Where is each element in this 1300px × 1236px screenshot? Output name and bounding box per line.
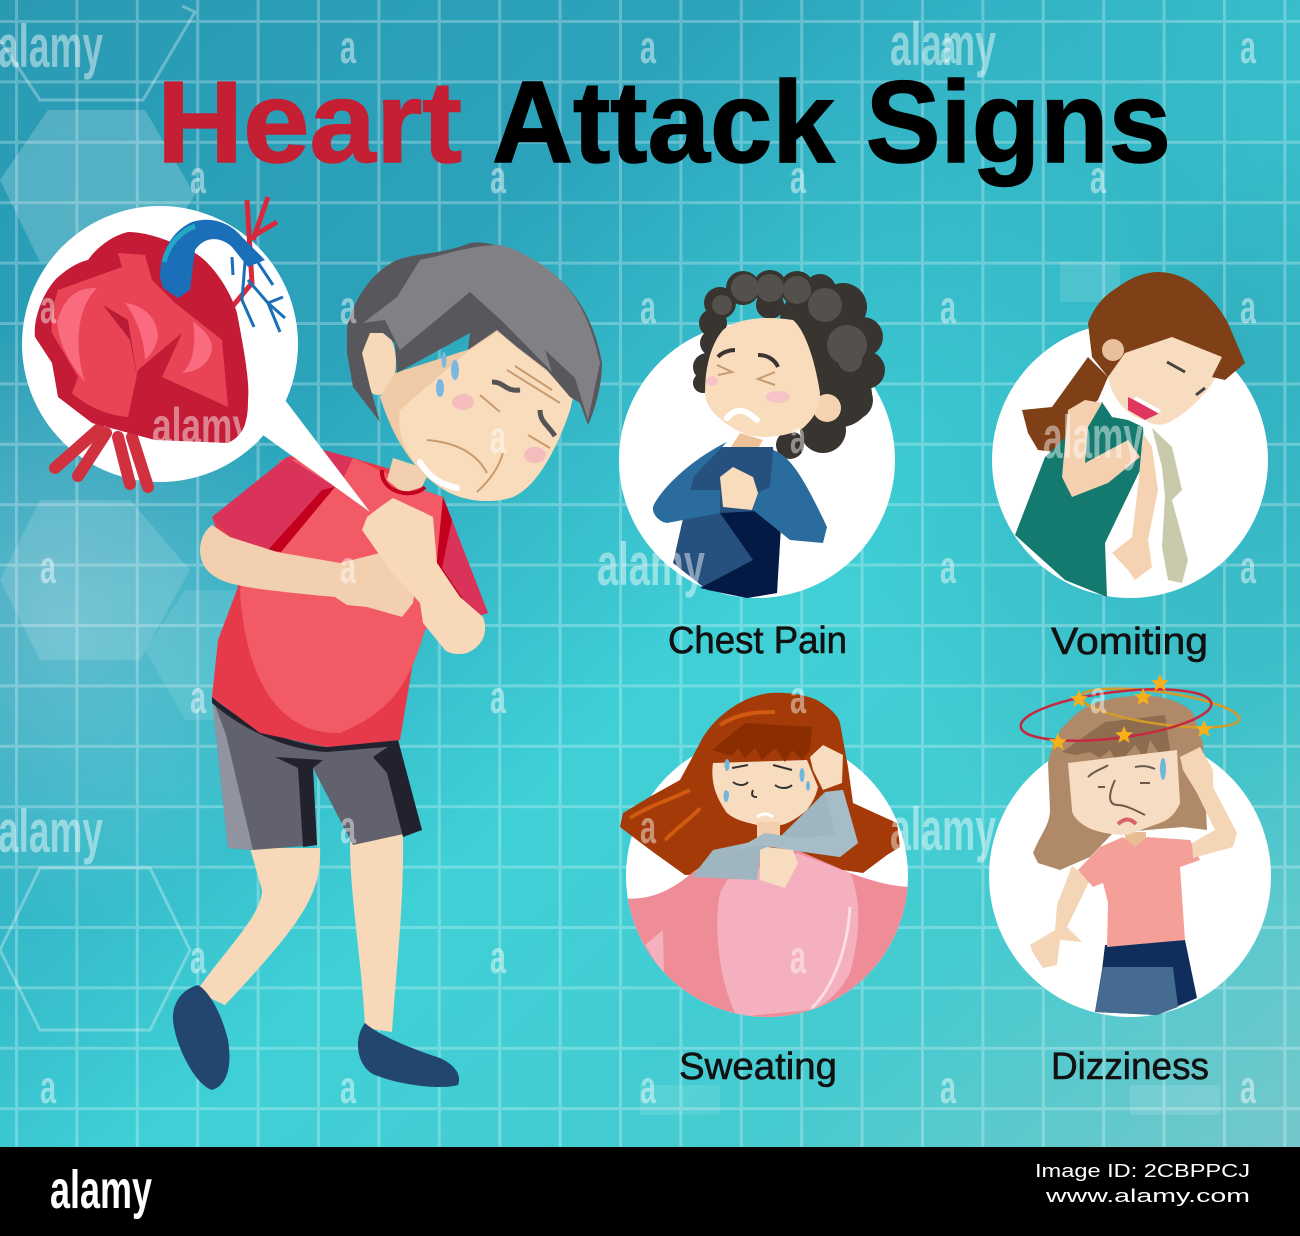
watermarks: a — [1240, 21, 1256, 73]
collar — [382, 470, 425, 493]
front leg — [350, 832, 403, 1032]
hair — [347, 242, 602, 425]
pants — [1095, 940, 1197, 1015]
white circle — [619, 322, 895, 598]
hair — [620, 693, 900, 875]
neck — [1125, 832, 1146, 847]
neck — [387, 458, 430, 493]
title — [157, 57, 1171, 187]
watermarks: a — [1240, 541, 1256, 593]
facial features — [732, 765, 792, 797]
watermarks: a — [340, 1061, 356, 1113]
white circle — [992, 322, 1268, 598]
watermarks: a — [1240, 801, 1256, 853]
watermarks: alamy — [597, 531, 705, 598]
pants lighter — [1095, 967, 1178, 1015]
watermarks: a — [340, 281, 356, 333]
watermarks: a — [640, 281, 656, 333]
fringe — [1062, 715, 1170, 765]
back leg — [196, 848, 320, 1005]
panel: heart callout — [22, 197, 370, 512]
sweat drops — [724, 759, 810, 802]
mouth — [1118, 820, 1136, 824]
hair — [1033, 696, 1207, 870]
watermarks: a — [790, 931, 806, 983]
watermarks: a — [1090, 671, 1106, 723]
white circle — [626, 735, 908, 1017]
mouth — [757, 814, 773, 817]
ear — [360, 329, 396, 395]
watermarks: a — [340, 21, 356, 73]
left arm — [200, 525, 417, 617]
icon: heart — [35, 197, 285, 487]
face — [380, 330, 573, 501]
figure — [1015, 272, 1245, 597]
panel: sweating — [620, 693, 915, 1030]
watermarks: a — [790, 671, 806, 723]
watermarks: a — [940, 541, 956, 593]
callout circle — [22, 206, 298, 482]
label: Vomiting: Vomiting — [1051, 621, 1208, 663]
white circle — [989, 735, 1271, 1017]
watermarks: a — [940, 1061, 956, 1113]
blanket — [628, 850, 908, 1017]
shirt — [1078, 837, 1200, 947]
watermarks: alamy — [0, 798, 103, 865]
callout pointer — [263, 400, 370, 512]
watermarks: a — [40, 541, 56, 593]
figure — [653, 270, 885, 598]
watermarks: a — [190, 151, 206, 203]
watermarks: a — [1090, 151, 1106, 203]
watermarks: a — [790, 151, 806, 203]
raised arm — [1180, 747, 1237, 858]
watermarks: a — [940, 21, 956, 73]
back shoe — [173, 985, 229, 1090]
watermark bar — [0, 1147, 1300, 1236]
logo text: alamy — [50, 1160, 152, 1220]
title word: Heart: Heart — [157, 57, 462, 187]
panel: vomiting — [992, 272, 1268, 598]
hair strands — [630, 712, 775, 840]
panel: chest pain — [619, 270, 895, 598]
watermarks: a — [490, 411, 506, 463]
watermarks: a — [340, 801, 356, 853]
right arm and hand — [362, 498, 485, 654]
watermarks: a — [640, 1061, 656, 1113]
watermarks: a — [40, 281, 56, 333]
face — [712, 760, 818, 825]
label: Dizziness: Dizziness — [1051, 1046, 1209, 1088]
watermarks: a — [40, 1061, 56, 1113]
label: Chest Pain: Chest Pain — [668, 620, 847, 662]
left arm — [1030, 866, 1090, 968]
sweat drop — [1160, 758, 1166, 780]
sweat drops — [436, 352, 459, 397]
forehead hand — [810, 745, 843, 790]
cheeks — [452, 394, 546, 463]
watermarks: alamy — [0, 13, 103, 80]
watermarks: a — [190, 931, 206, 983]
watermarks: a — [940, 281, 956, 333]
shorts — [212, 697, 422, 850]
front shoe — [358, 1023, 459, 1087]
watermarks: a — [790, 411, 806, 463]
face — [1068, 750, 1180, 835]
watermarks: a — [340, 541, 356, 593]
facial features — [1088, 765, 1155, 815]
site url: www.alamy.com — [1044, 1186, 1250, 1206]
lower hand — [760, 847, 798, 888]
panel: dizziness — [989, 674, 1271, 1017]
watermarks: a — [490, 151, 506, 203]
title words: Attack Signs: Attack Signs — [492, 57, 1171, 187]
image id: Image ID: 2CBPPCJ — [1035, 1161, 1250, 1181]
watermarks: a — [490, 931, 506, 983]
sleeve — [692, 790, 858, 880]
dizzy rings — [1018, 680, 1241, 750]
watermarks: alamy — [152, 398, 252, 454]
watermarks: alamy — [1043, 404, 1143, 471]
watermarks: a — [640, 21, 656, 73]
neck — [757, 822, 780, 840]
mouth highlight — [420, 462, 457, 488]
watermarks: a — [190, 671, 206, 723]
eyes and wrinkles — [427, 366, 560, 492]
panel: man illustration — [173, 242, 602, 1090]
watermarks: a — [1240, 281, 1256, 333]
watermarks: a — [490, 671, 506, 723]
eyebrows — [492, 382, 555, 436]
watermarks: alamy — [890, 11, 996, 78]
stars — [1049, 674, 1213, 750]
label: Sweating: Sweating — [679, 1046, 837, 1088]
shirt — [212, 450, 488, 747]
sleeve highlight — [735, 790, 858, 857]
watermarks: a — [640, 801, 656, 853]
watermarks: alamy — [890, 796, 996, 863]
watermarks: a — [1240, 1061, 1256, 1113]
fringe — [712, 723, 812, 762]
